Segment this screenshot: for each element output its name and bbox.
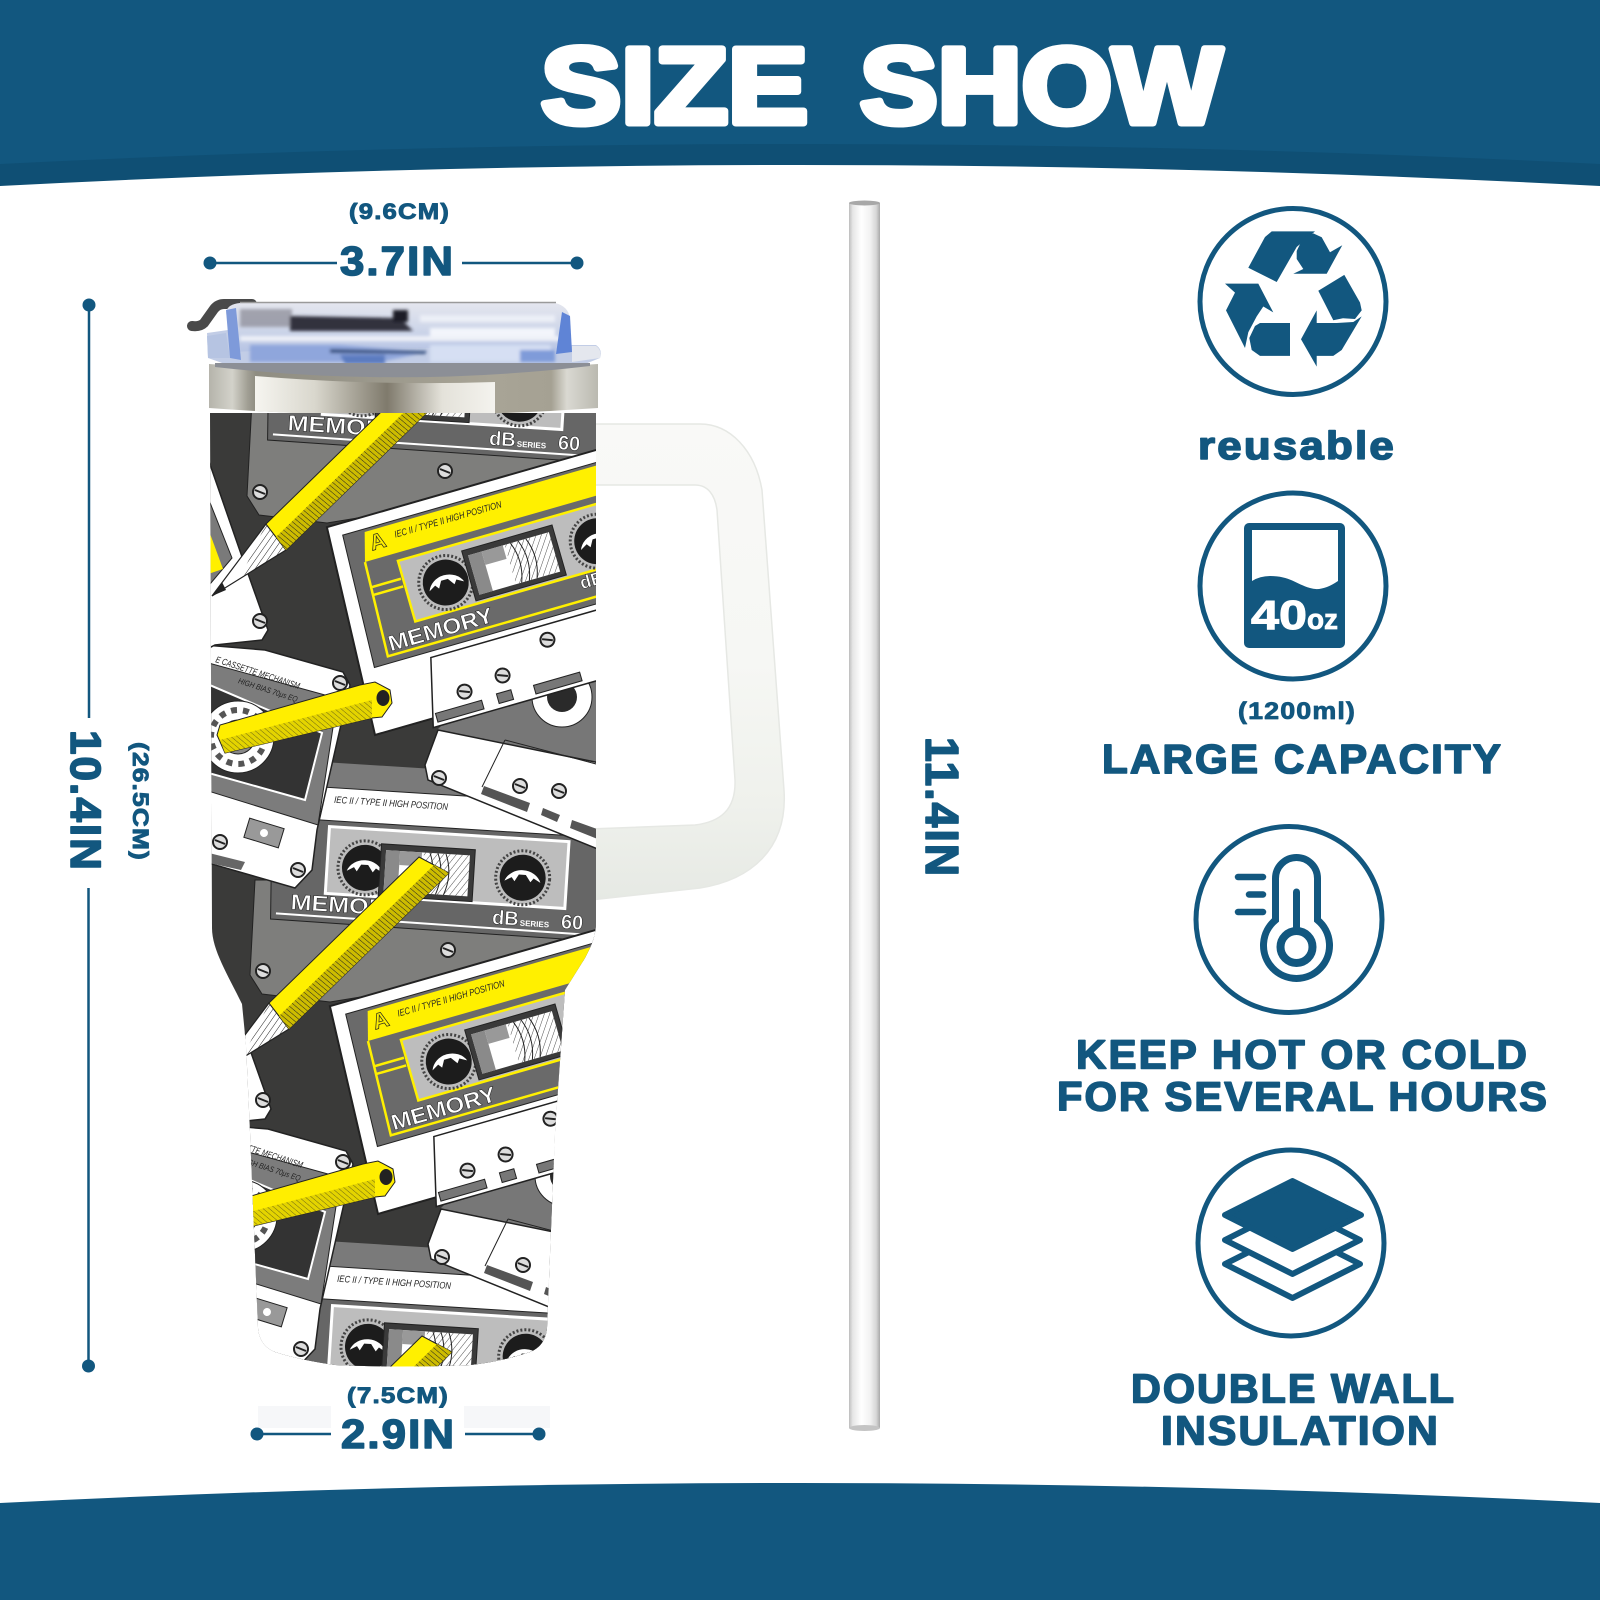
- bottom width dimension: (7.5CM): [347, 1383, 449, 1408]
- feature: large capacity: (1200ml): [1238, 698, 1356, 725]
- title: SHOW: [860, 25, 1222, 146]
- bottom width dimension: [250, 1383, 550, 1457]
- tumbler handle: [590, 424, 784, 900]
- icon: recycle: [1225, 231, 1362, 367]
- feature: keep hot or cold: [1057, 826, 1549, 1120]
- tumbler body with cassette pattern: [210, 413, 596, 1366]
- straw length label: 11.4IN: [916, 737, 968, 878]
- feature: reusable: [1198, 208, 1396, 468]
- icon: layers: [1225, 1181, 1361, 1298]
- icon: 40oz cup: 40: [1251, 592, 1307, 638]
- height dimension: [61, 298, 153, 1372]
- height dimension: (26.5CM): [128, 742, 153, 861]
- feature: double wall insulation: [1131, 1150, 1456, 1454]
- bottom width dimension: 2.9IN: [341, 1411, 456, 1457]
- feature: large capacity: LARGE CAPACITY: [1102, 736, 1503, 782]
- top width dimension: (9.6CM): [349, 199, 450, 224]
- icon: thermometer: [1238, 858, 1330, 978]
- icon: 40oz cup: oz: [1307, 604, 1338, 636]
- feature: keep hot or cold: FOR SEVERAL HOURS: [1057, 1074, 1549, 1120]
- header band: [0, 0, 1600, 186]
- feature: keep hot or cold: KEEP HOT OR COLD: [1076, 1032, 1529, 1078]
- feature: large capacity: [1102, 493, 1503, 782]
- top width dimension: 3.7IN: [340, 238, 455, 284]
- footer band: [0, 1483, 1600, 1600]
- straw: [849, 200, 880, 1431]
- icon: 40oz cup: [1244, 523, 1345, 648]
- feature: double wall insulation: INSULATION: [1161, 1408, 1440, 1454]
- feature: reusable: reusable: [1198, 425, 1396, 468]
- height dimension: 10.4IN: [61, 730, 109, 872]
- title: [541, 25, 1222, 146]
- tumbler steel ring: [209, 363, 598, 416]
- feature: double wall insulation: DOUBLE WALL: [1131, 1366, 1456, 1412]
- top width dimension: [204, 199, 584, 284]
- title: SIZE: [541, 25, 808, 146]
- tumbler lid: [192, 302, 601, 364]
